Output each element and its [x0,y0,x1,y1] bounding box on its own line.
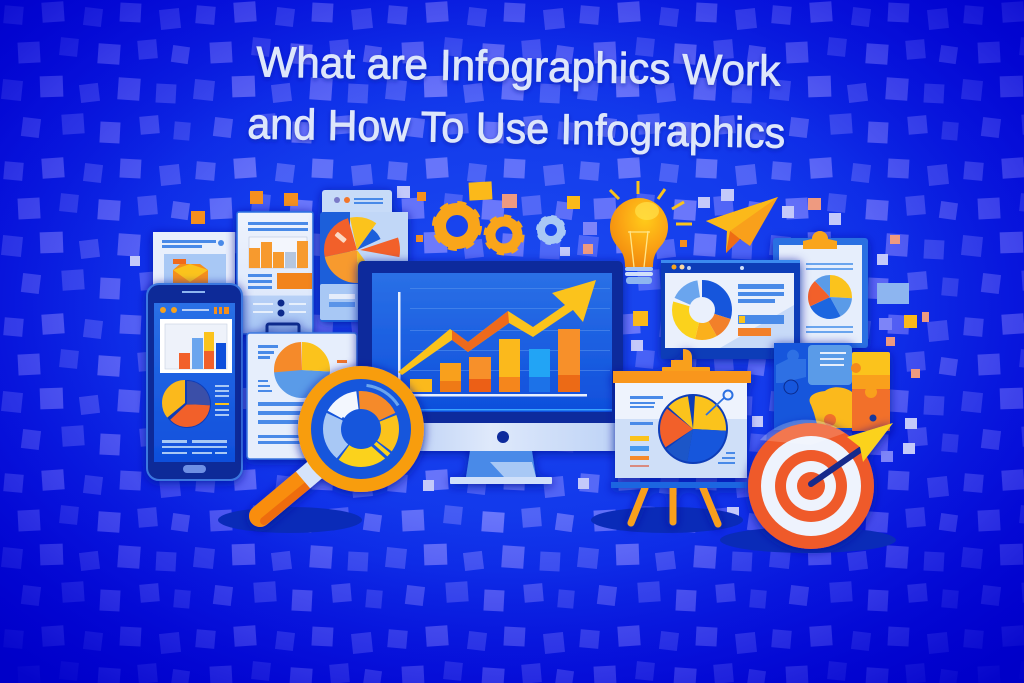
gear small [538,216,564,244]
panel: smartphone [147,284,242,480]
icon: envelope [173,259,208,290]
icon: light bulb [610,181,692,284]
monitor chin [358,423,623,451]
title: What are Infographics Work [256,38,781,96]
icon: target with arrow [748,420,893,549]
easel pie chart [658,394,728,464]
screen [372,273,612,412]
phone bar chart [160,319,232,373]
mini bar chart [249,241,308,268]
clipboard pie chart [819,286,841,308]
panel: envelope document [153,232,235,302]
panel: bar chart document [237,212,313,334]
report pie chart [288,356,316,384]
bar chart [410,329,580,392]
target arrow [811,423,893,484]
gear medium [486,217,522,253]
panel: clipboard [773,231,868,348]
light blue box [877,283,909,304]
bulb rays [610,181,692,224]
title: and How To Use Infographics [247,100,786,158]
panel: presentation easel [611,349,751,524]
icon: magnifying glass [260,372,418,521]
monitor [358,261,623,484]
gear large [435,204,479,248]
panel: pie chart document [320,190,408,322]
monitor stand [450,451,552,484]
chart axes [398,292,587,396]
arrow: rising trend [398,280,596,375]
panel: browser dashboard [661,260,800,359]
pie chart [340,230,380,270]
panel: jigsaw puzzle [774,343,890,431]
floating accent squares [130,181,929,518]
magnifier handle [260,463,323,521]
donut chart [680,288,724,332]
title [247,38,786,158]
ground shadows [218,507,896,553]
magnifier gauge ring [317,385,405,473]
easel clip [662,349,710,378]
phone pie chart [163,380,211,428]
icon: paper plane [706,197,778,253]
panel: report document [247,324,357,459]
easel legs [631,488,718,524]
icon: gears [435,204,564,253]
clipboard clip [803,231,837,249]
